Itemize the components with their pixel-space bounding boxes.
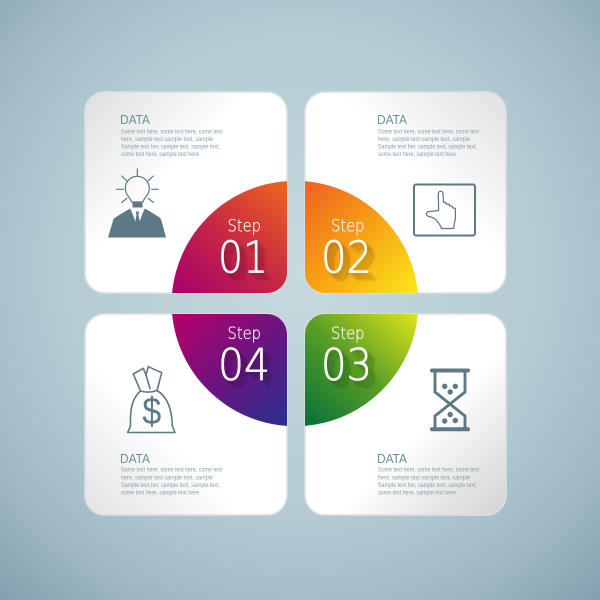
- body text 04: [121, 467, 222, 496]
- card 02: [305, 92, 506, 293]
- body text 02: here, sample text sample text, sample: [378, 136, 470, 143]
- label: step 01: Step: [228, 216, 261, 236]
- wedge 03: [304, 313, 418, 426]
- body text 04: Sample text her, sample text, sample text,: [121, 482, 220, 489]
- body text 03: here, sample text sample text, sample: [378, 474, 470, 481]
- icon: money bag: [128, 367, 175, 433]
- body text 02: Sample text her, sample text, sample text,: [378, 144, 477, 151]
- number 04: 04: [218, 341, 270, 391]
- body text 01: [121, 128, 222, 158]
- body text 03: some text here, sample text here: [378, 489, 456, 496]
- number 02: 02: [321, 234, 372, 284]
- body text 04: some text here, sample text here: [121, 489, 199, 496]
- body text 04: here, sample text sample text, sample: [121, 474, 213, 481]
- number 01: 01: [218, 234, 268, 284]
- body text 04: Some text here, some text here, come text: [121, 467, 222, 474]
- body text 02: Some text here, some text here, come text: [378, 128, 479, 136]
- wedge 02: [304, 181, 418, 294]
- heading 03: DATA: [377, 452, 408, 466]
- body text 01: some text here, sample text here: [121, 151, 199, 158]
- icon: pointing hand in frame: [414, 184, 475, 236]
- label: step 03: Step: [331, 324, 364, 343]
- panel: step 02: [304, 92, 506, 294]
- body text 03: Some text here, some text here, come text: [378, 467, 479, 474]
- icon: hourglass: [432, 370, 468, 429]
- card 03: [305, 314, 506, 515]
- panel: step 01: [85, 92, 288, 294]
- label: step 04: Step: [228, 324, 261, 343]
- body text 01: here, sample text sample text, sample: [121, 136, 213, 143]
- heading 02: DATA: [377, 113, 408, 127]
- card 04: [85, 314, 287, 515]
- body text 03: [378, 467, 479, 496]
- body text 02: [378, 128, 479, 158]
- icon: lightbulb head businessman: [108, 169, 166, 238]
- body text 01: Sample text her, sample text, sample text,: [121, 144, 220, 151]
- label: step 02: Step: [331, 216, 364, 236]
- panel: step 04: [85, 313, 288, 515]
- wedge 01: [172, 181, 288, 294]
- icon: money bag: $: [142, 391, 161, 433]
- body text 01: Some text here, some text here, come text: [121, 128, 222, 136]
- body text 03: Sample text her, sample text, sample text,: [378, 482, 477, 489]
- panel: step 03: [304, 313, 506, 515]
- body text 02: some text here, sample text here: [378, 151, 456, 158]
- card 01: [85, 92, 287, 293]
- heading 04: DATA: [120, 452, 151, 466]
- heading 01: DATA: [120, 113, 151, 127]
- wedge 04: [172, 313, 288, 426]
- number 03: 03: [321, 341, 372, 391]
